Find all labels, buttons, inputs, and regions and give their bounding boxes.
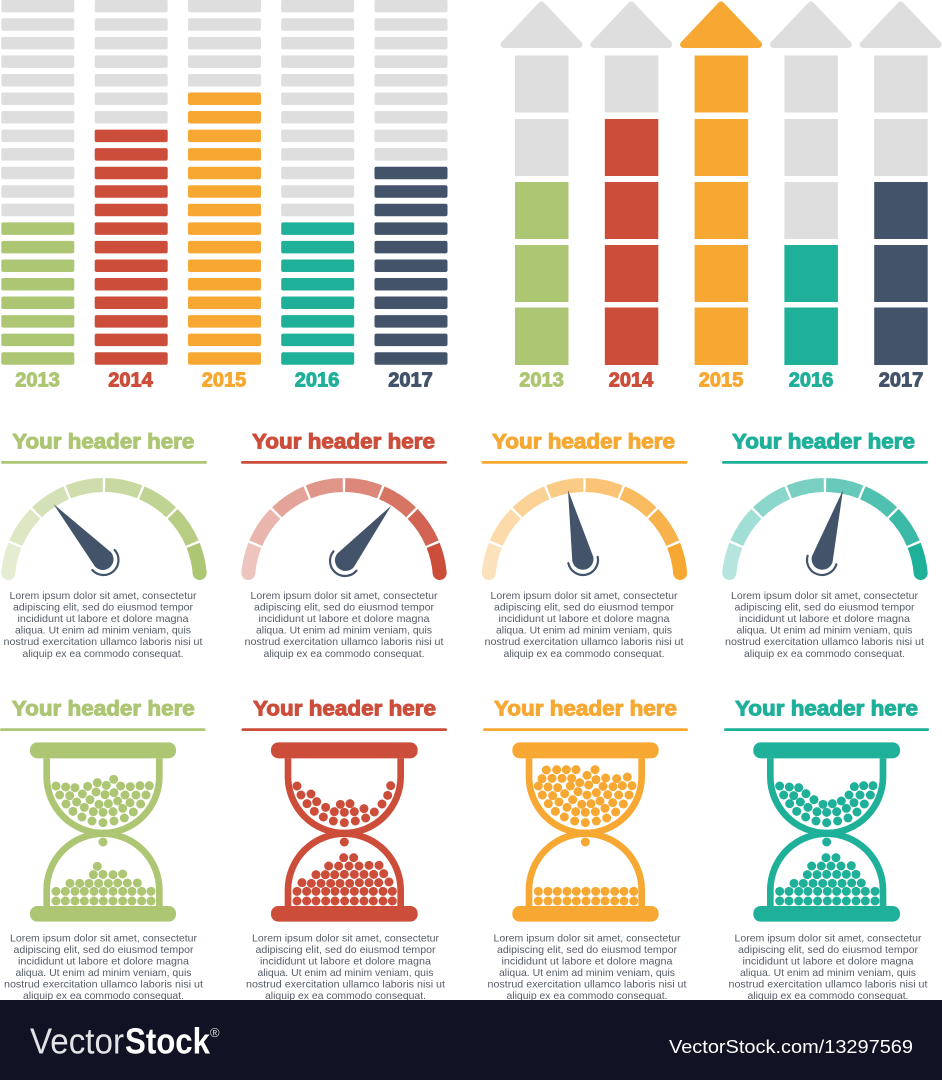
body text (244, 591, 444, 660)
panel: teal gauge (722, 429, 928, 660)
panel: teal hourglass (724, 696, 929, 1002)
body text: aliquip ex ea commodo consequat. (23, 991, 184, 1002)
body text: aliquip ex ea commodo consequat. (744, 649, 905, 660)
logo: VectorStock: Vector (30, 1020, 124, 1062)
body text (484, 591, 684, 660)
body text: aliqua. Ut enim ad minim veniam, quis (740, 968, 916, 979)
arrow 2017 (863, 5, 938, 365)
body text: incididunt ut labore et dolore magna (502, 956, 673, 968)
image id: VectorStock.com/13297569 (669, 1036, 913, 1057)
body text: aliquip ex ea commodo consequat. (22, 649, 184, 660)
body text: Lorem ipsum dolor sit amet, consectetur (250, 591, 438, 602)
bar column 2016 (281, 0, 354, 365)
panel: red gauge (241, 429, 447, 660)
gauge needle (324, 496, 403, 582)
body text: nostrud exercitation ullamco laboris nisi ut (4, 637, 203, 648)
arrow 2014 (594, 5, 669, 365)
body text: incididunt ut labore et dolore magna (260, 956, 431, 968)
body text: aliqua. Ut enim ad minim veniam, quis (736, 626, 912, 637)
bar column 2014 (95, 0, 168, 365)
body text: nostrud exercitation ullamco laboris nisi ut (4, 980, 203, 990)
year labels, arrow chart: 2016 (789, 370, 833, 392)
body text (4, 934, 203, 1002)
year labels, arrow chart: 2014 (609, 370, 654, 392)
body text: aliqua. Ut enim ad minim veniam, quis (258, 968, 434, 979)
body text: incididunt ut labore et dolore magna (739, 614, 910, 625)
body text: adipiscing elit, sed do eiusmod tempor (254, 603, 435, 614)
year labels, arrow chart (519, 370, 923, 392)
panel: red hourglass (242, 696, 447, 1002)
bar column 2015 (188, 0, 261, 365)
body text: incididunt ut labore et dolore magna (258, 614, 430, 625)
heading: Your header here (732, 429, 915, 453)
body text: Lorem ipsum dolor sit amet, consectetur (252, 934, 440, 944)
icon: hourglass (271, 742, 418, 922)
gauge needle (553, 487, 601, 578)
gauge needle (803, 486, 857, 579)
body text: nostrud exercitation ullamco laboris nisi ut (244, 637, 444, 648)
body text: nostrud exercitation ullamco laboris nisi ut (246, 980, 445, 990)
body text: nostrud exercitation ullamco laboris nisi ut (725, 637, 924, 648)
year labels, arrow chart: 2015 (699, 370, 743, 392)
panel: orange gauge (482, 429, 688, 660)
year labels, bar chart: 2015 (202, 370, 246, 392)
heading: Your header here (494, 696, 677, 720)
year labels, arrow chart: 2017 (879, 370, 923, 392)
icon: hourglass (512, 742, 659, 922)
body text: incididunt ut labore et dolore magna (18, 956, 189, 968)
body text (728, 934, 928, 1002)
body text: aliqua. Ut enim ad minim veniam, quis (499, 968, 675, 979)
body text: nostrud exercitation ullamco laboris nisi ut (728, 980, 928, 990)
icon: hourglass (30, 742, 176, 922)
heading: Your header here (735, 696, 918, 720)
body text: nostrud exercitation ullamco laboris nisi ut (488, 980, 687, 990)
body text: incididunt ut labore et dolore magna (742, 956, 914, 968)
body text: adipiscing elit, sed do eiusmod tempor (256, 945, 436, 956)
gauge dial (1, 485, 207, 580)
gauge dial (241, 485, 447, 580)
body text: adipiscing elit, sed do eiusmod tempor (497, 945, 678, 956)
body text: adipiscing elit, sed do eiusmod tempor (14, 945, 194, 956)
gauge needle (42, 494, 125, 581)
body text (246, 934, 445, 1002)
year labels, bar chart: 2013 (15, 370, 60, 392)
body text: Lorem ipsum dolor sit amet, consectetur (734, 934, 922, 944)
body text: adipiscing elit, sed do eiusmod tempor (13, 603, 194, 614)
bar column 2013 (1, 0, 74, 365)
body text: Lorem ipsum dolor sit amet, consectetur (490, 591, 678, 602)
body text: aliquip ex ea commodo consequat. (748, 991, 908, 1002)
body text: adipiscing elit, sed do eiusmod tempor (494, 603, 675, 614)
body text: aliqua. Ut enim ad minim veniam, quis (496, 626, 672, 637)
body text: Lorem ipsum dolor sit amet, consectetur (10, 934, 198, 944)
body text: incididunt ut labore et dolore magna (498, 614, 670, 625)
body text: nostrud exercitation ullamco laboris nisi ut (484, 637, 684, 648)
heading: Your header here (253, 696, 436, 720)
heading: Your header here (12, 696, 195, 720)
year labels, arrow chart: 2013 (519, 370, 564, 392)
arrow 2013 (504, 5, 579, 365)
body text: aliquip ex ea commodo consequat. (506, 991, 668, 1002)
body text (488, 934, 687, 1002)
logo: VectorStock: ® (210, 1025, 220, 1040)
logo: VectorStock: Stock (125, 1020, 211, 1062)
arrow 2016 (773, 5, 848, 365)
body text: Lorem ipsum dolor sit amet, consectetur (10, 591, 197, 602)
icon: hourglass (753, 742, 900, 922)
body text: aliquip ex ea commodo consequat. (265, 991, 426, 1002)
footer band (0, 1000, 942, 1080)
body text (4, 591, 203, 660)
year labels, bar chart: 2014 (108, 370, 154, 392)
heading: Your header here (252, 429, 435, 453)
gauge dial (482, 485, 687, 580)
arrow chart: block arrows by year (504, 5, 938, 392)
body text: Lorem ipsum dolor sit amet, consectetur (494, 934, 681, 944)
body text: adipiscing elit, sed do eiusmod tempor (734, 603, 915, 614)
body text: adipiscing elit, sed do eiusmod tempor (738, 945, 919, 956)
gauge dial (722, 485, 928, 580)
panel: green hourglass (0, 696, 206, 1002)
body text: aliqua. Ut enim ad minim veniam, quis (15, 626, 191, 637)
body text: incididunt ut labore et dolore magna (18, 614, 189, 625)
bar column 2017 (374, 0, 448, 365)
panel: orange hourglass (483, 696, 688, 1002)
body text: aliqua. Ut enim ad minim veniam, quis (16, 968, 192, 979)
body text: Lorem ipsum dolor sit amet, consectetur (731, 591, 919, 602)
body text: aliqua. Ut enim ad minim veniam, quis (256, 626, 432, 637)
bar chart: stacked level bars by year (1, 0, 448, 392)
body text: aliquip ex ea commodo consequat. (504, 649, 664, 660)
body text: aliquip ex ea commodo consequat. (264, 649, 424, 660)
logo: VectorStock (30, 1020, 220, 1062)
year labels, bar chart (15, 370, 433, 392)
arrow 2015 (684, 5, 759, 365)
body text (725, 591, 924, 660)
panel: green gauge (1, 429, 207, 660)
heading: Your header here (12, 429, 194, 453)
year labels, bar chart: 2016 (295, 370, 339, 392)
year labels, bar chart: 2017 (388, 370, 433, 392)
heading: Your header here (492, 429, 675, 453)
